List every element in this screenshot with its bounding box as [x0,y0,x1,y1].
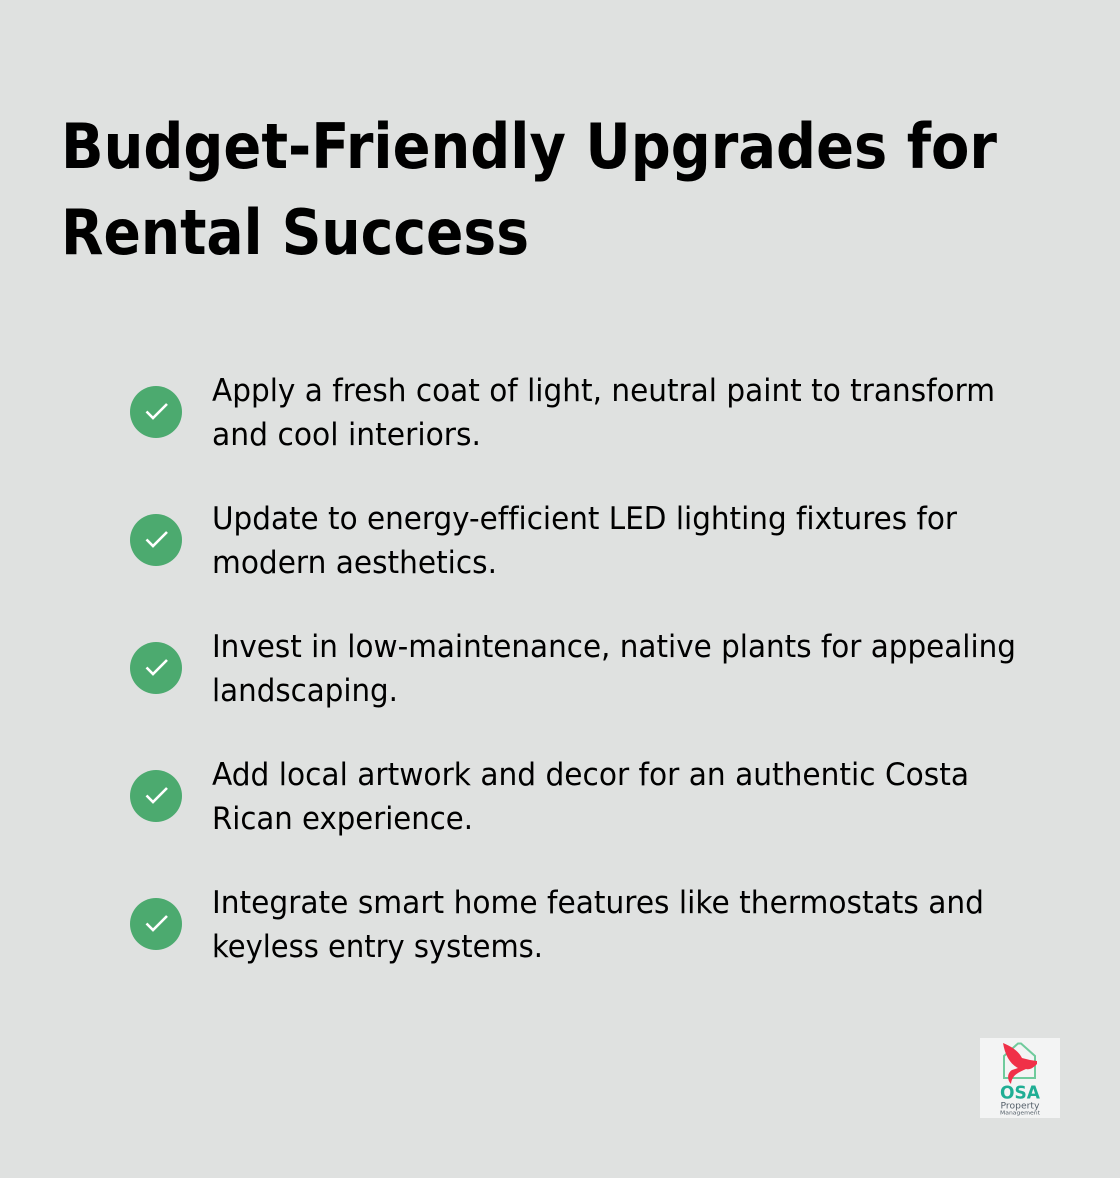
icon: check 5 [130,898,182,950]
title: Budget-Friendly Upgrades for [61,110,997,183]
title [61,110,997,269]
text: item 4: Rican experience. [212,801,473,837]
icon: check 4 [130,770,182,822]
icon: check 1 [130,386,182,438]
text: item 5 [212,885,984,965]
icon: red bird [1003,1043,1037,1084]
text: item 2: Update to energy-efficient LED lighting fixtures for [212,501,957,537]
text: item 4: Add local artwork and decor for an authentic Costa [212,757,969,793]
icon: house outline [1004,1044,1035,1078]
text: item 1: and cool interiors. [212,417,481,453]
icon: check 3 [130,642,182,694]
text: item 3: landscaping. [212,673,398,709]
item 2 [130,501,957,581]
text: item 5: Integrate smart home features like thermostats and [212,885,984,921]
item 3 [130,629,1016,709]
text: item 3: Invest in low-maintenance, native plants for appealing [212,629,1016,665]
text: item 1: Apply a fresh coat of light, neutral paint to transform [212,373,995,409]
text: item 5: keyless entry systems. [212,929,543,965]
logo: OSA Property Management [980,1038,1060,1118]
item 4 [130,757,969,837]
checklist [130,373,1016,965]
item 5 [130,885,984,965]
icon: check 2 [130,514,182,566]
text: item 1 [212,373,995,453]
text: item 4 [212,757,969,837]
title: Rental Success [61,196,529,269]
logo wordmark: OSA [1000,1082,1040,1104]
logo: OSA Property Management: Property [1000,1102,1040,1112]
text: item 2 [212,501,957,581]
text: item 3 [212,629,1016,709]
logo: OSA Property Management: Management [1000,1110,1041,1116]
text: item 2: modern aesthetics. [212,545,497,581]
item 1 [130,373,995,453]
